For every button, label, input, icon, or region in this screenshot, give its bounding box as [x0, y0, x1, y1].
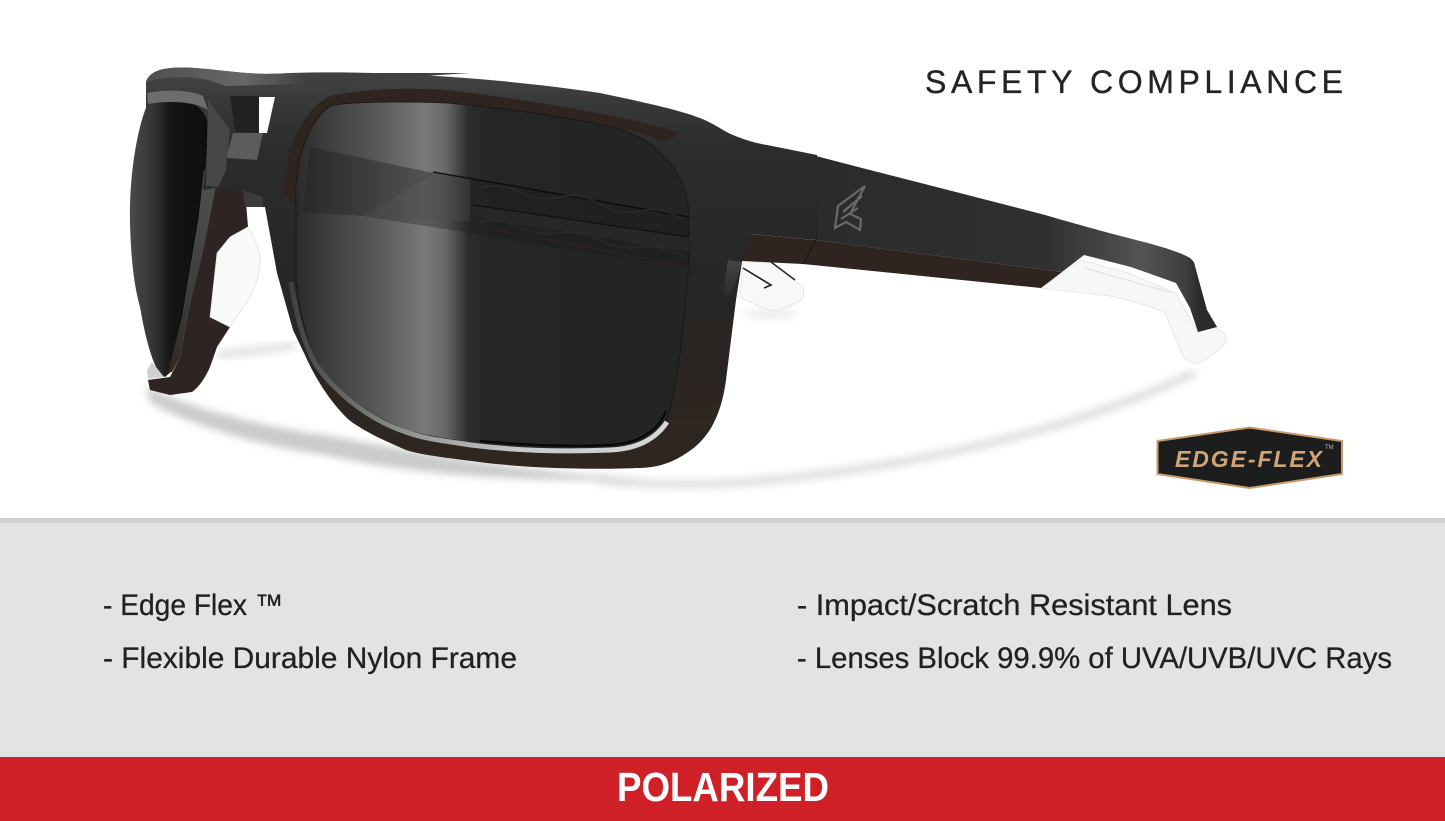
panel: features [0, 518, 1445, 758]
far temple tip [740, 262, 804, 310]
banner: polarized: POLARIZED [617, 764, 829, 810]
lens reflection band [303, 147, 689, 268]
nose pad [210, 227, 260, 327]
badge: Edge-Flex: TM [1325, 445, 1334, 451]
front frame [146, 68, 817, 469]
badge: Edge-Flex: EDGE-FLEX [1175, 446, 1324, 472]
feature: nylon frame: - Flexible Durable Nylon Frame [103, 642, 517, 675]
far lens [130, 97, 210, 377]
brown lip above lens [284, 89, 682, 205]
badge: Edge-Flex [1158, 428, 1342, 488]
feature: Edge Flex: - Edge Flex ™ [103, 589, 283, 622]
bridge details [146, 68, 742, 295]
lens lower rim highlight [291, 282, 667, 451]
banner: polarized [0, 757, 1445, 821]
nose arm and side frame [147, 170, 248, 395]
temple arm [729, 156, 1217, 332]
feature: UV: - Lenses Block 99.9% of UVA/UVB/UVC Rays [797, 642, 1392, 675]
icon: temple logo [835, 186, 865, 230]
main lens [291, 102, 689, 451]
feature: lens: - Impact/Scratch Resistant Lens [797, 589, 1232, 622]
title: SAFETY COMPLIANCE [925, 64, 1343, 100]
ground shadow [146, 310, 1192, 484]
temple brown lower band [729, 234, 1062, 288]
temple arm white tip [1041, 260, 1226, 364]
